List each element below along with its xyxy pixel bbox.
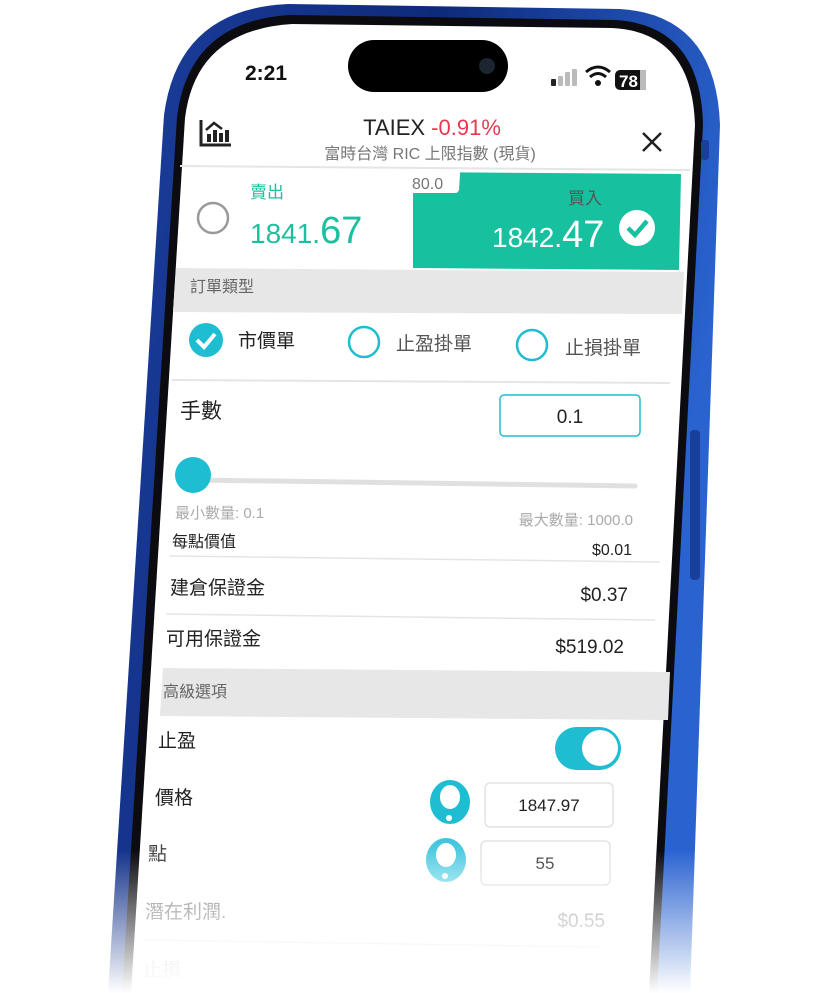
header: 富時台灣 RIC 上限指數 (現貨): [324, 145, 536, 163]
band: order type: [173, 268, 684, 314]
header: TAIEX -0.91%: [363, 115, 501, 140]
take profit: 止損: [143, 959, 181, 981]
slider: [175, 457, 635, 529]
take profit: 1847.97: [518, 796, 580, 815]
info rows: 可用保證金: [166, 628, 261, 650]
take profit: 價格: [155, 787, 193, 809]
info rows: 建倉保證金: [170, 577, 265, 599]
status bar: [245, 40, 646, 92]
take profit: 55: [536, 854, 554, 873]
status bar: 2:21: [245, 62, 287, 85]
sell/buy row: 買入: [568, 189, 602, 208]
take profit: 點: [148, 843, 167, 865]
order type options: 市價單: [238, 330, 295, 352]
band: order type: 訂單類型: [190, 278, 254, 296]
lot size: 0.1: [557, 407, 583, 428]
status bar: 78: [619, 72, 638, 91]
take profit: 潛在利潤.: [145, 901, 226, 923]
lot size: [180, 395, 640, 436]
sell/buy row: 1841.67: [250, 210, 362, 252]
sell/buy row: 賣出: [250, 183, 284, 202]
info rows: $0.01: [592, 542, 632, 559]
sell/buy row: [180, 166, 690, 270]
info rows: $0.37: [580, 585, 628, 606]
band: advanced: [160, 668, 670, 720]
lot size: 手數: [180, 400, 222, 423]
order type options: 止盈掛單: [396, 333, 472, 355]
order type options: [172, 323, 670, 383]
order type options: 止損掛單: [565, 337, 641, 359]
info rows: $519.02: [555, 637, 624, 658]
info rows: [166, 533, 660, 658]
slider: 最大數量: 1000.0: [519, 512, 633, 529]
bottom fade: [0, 850, 822, 993]
side buttons: [690, 140, 709, 580]
sell/buy row: 80.0: [412, 176, 443, 193]
band: advanced: 高級選項: [163, 683, 227, 701]
phone screen: [131, 24, 695, 993]
phone body: [108, 4, 720, 993]
take profit: 止盈: [158, 730, 196, 752]
sell/buy row: 1842.47: [492, 214, 604, 256]
slider: 最小數量: 0.1: [175, 505, 264, 522]
take profit: [143, 727, 621, 981]
info rows: 每點價值: [172, 533, 236, 551]
take profit: $0.55: [557, 911, 605, 932]
header: [201, 115, 661, 163]
